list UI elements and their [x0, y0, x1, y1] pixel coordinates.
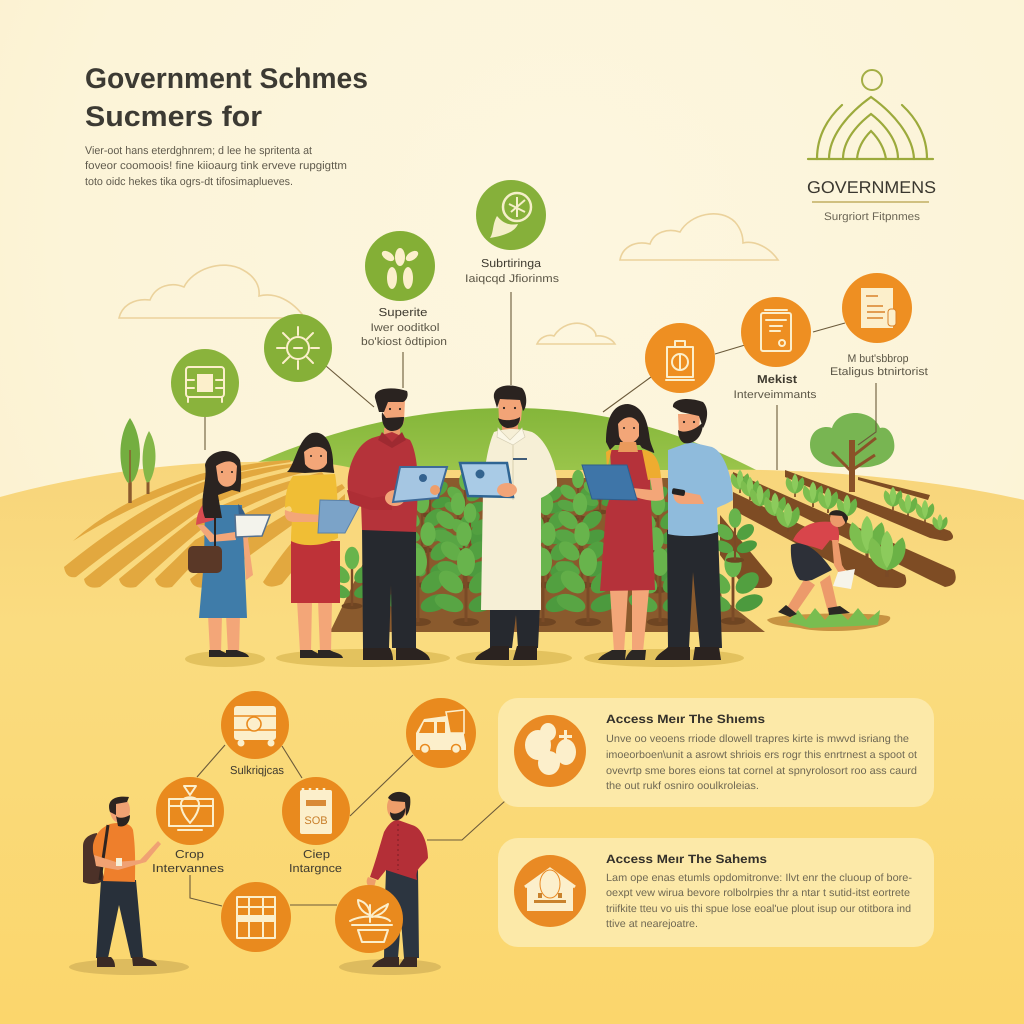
- person: man in red shirt: [347, 388, 447, 660]
- icon: orange circle canister: [645, 323, 715, 393]
- icon: green circle building: [171, 349, 239, 417]
- labels upper: bo'kiost ôdtipion: [361, 336, 447, 348]
- labels upper: [361, 258, 928, 401]
- logo: government arches: GOVERNMENS: [807, 178, 936, 197]
- card two text: ttive at nearejoatre.: [606, 918, 698, 930]
- intro text: foveor coomoois! fine kiioaurg tink erveve rupgigttm: [85, 160, 347, 172]
- labels lower: [152, 765, 342, 875]
- shadows lower figures: [69, 959, 441, 975]
- person: woman in yellow top: [285, 433, 362, 658]
- card one text: [606, 733, 917, 792]
- icon: lower orange calendar: SOB: [304, 815, 328, 827]
- left furrow stripes: [64, 460, 345, 588]
- icon: barn: [514, 855, 586, 927]
- labels upper: Iaiqcqd Jfiorinms: [465, 273, 560, 285]
- labels lower: Sulkriqjcas: [230, 765, 284, 777]
- card two heading: Access Meır The Sahems: [606, 852, 767, 866]
- icon: lower orange grid: [221, 882, 291, 952]
- ground shadows: [185, 649, 744, 667]
- labels upper: Iwer ooditkol: [370, 322, 440, 334]
- icon: lower orange calendar: [282, 777, 350, 845]
- icon: lower orange truck: [406, 698, 476, 768]
- labels upper: Superite: [378, 307, 428, 319]
- wheat field ground: [0, 461, 1024, 1024]
- icon: orange circle document: [842, 273, 912, 343]
- logo: government arches: Surgriort Fitpnmes: [824, 211, 921, 223]
- intro text: Vier-oot hans eterdghnrem; d lee he spritenta at: [85, 145, 312, 157]
- tree right: [810, 413, 894, 492]
- icon: lower top orange cart: [221, 691, 289, 759]
- labels upper: M but'sbbrop: [848, 353, 908, 365]
- card two text: Lam ope enas etumls opdomitronve: Ilvt enr the cluoup of bore-: [606, 872, 913, 884]
- card two text: [606, 872, 913, 930]
- person: woman in red dress: [582, 404, 664, 660]
- card one text: the out rukf osniro ooulkroleias.: [606, 780, 759, 792]
- person: woman in blue dress: [188, 451, 270, 657]
- title: Government Schmes: [85, 63, 368, 95]
- panel: access card two: [498, 838, 934, 947]
- card one text: ovevrtp sme bores eions tat cornel at spnyrolosort roo ass caurd: [606, 765, 917, 777]
- title: Sucmers for: [85, 101, 262, 133]
- card one text: imoeorboen\unit a asrowt shriois ers rogr this enrtrnest a spoot ot: [606, 749, 917, 761]
- icon: farm animals: [514, 715, 586, 787]
- card two text: triifkite tteu vo uis thi spue lose eoal'ue plout isup our otitbora ind: [606, 903, 911, 915]
- labels lower: Intervannes: [152, 863, 224, 875]
- intro text: toto oidc hekes tika ogrs-dt tifosimaplueves.: [85, 176, 293, 188]
- person: hiker with backpack: [83, 797, 161, 967]
- right crop rows: [701, 470, 956, 625]
- person: man in blue shirt: [655, 399, 733, 660]
- card two text: oexpt vew wirua bevore rolbolrpies thr a ntar t sutid-itst eortrete: [606, 887, 910, 899]
- title: [85, 63, 368, 133]
- person: man in red shirt lower: [367, 792, 428, 967]
- labels lower: Ciep: [303, 849, 330, 861]
- labels upper: Mekist: [757, 374, 797, 386]
- icon: green circle sun wheel: [264, 314, 332, 382]
- intro text: [85, 145, 347, 188]
- farmer bending with clipboard: [767, 510, 890, 631]
- icon: lower orange heart bag: [156, 777, 224, 845]
- labels upper: Subrtiringa: [481, 258, 542, 270]
- connector lines lower: [190, 745, 505, 906]
- labels upper: Etaligus btnirtorist: [830, 366, 928, 378]
- connector lines upper: [205, 292, 876, 470]
- labels lower: Intargnce: [289, 863, 342, 875]
- icon: lower orange potted plant: [335, 885, 403, 953]
- soil bed with crops: [325, 467, 765, 632]
- green hill: [240, 408, 810, 500]
- trees left: [120, 418, 156, 503]
- card one text: Unve oo veoens rriode dlowell trapres kirte is mwvd isriang the: [606, 733, 909, 745]
- labels lower: Crop: [175, 849, 204, 861]
- logo: government arches: [807, 70, 936, 223]
- card one heading: Access Meır The Shıems: [606, 712, 765, 726]
- icon: orange circle calendar panel: [741, 297, 811, 367]
- icon: green circle seeds: [365, 231, 435, 301]
- clouds: [119, 214, 778, 344]
- person: man in white coat: [460, 385, 557, 660]
- labels upper: Interveimmants: [734, 389, 817, 401]
- icon: green circle leaf dish: [476, 180, 546, 250]
- panel: access card one: [498, 698, 934, 807]
